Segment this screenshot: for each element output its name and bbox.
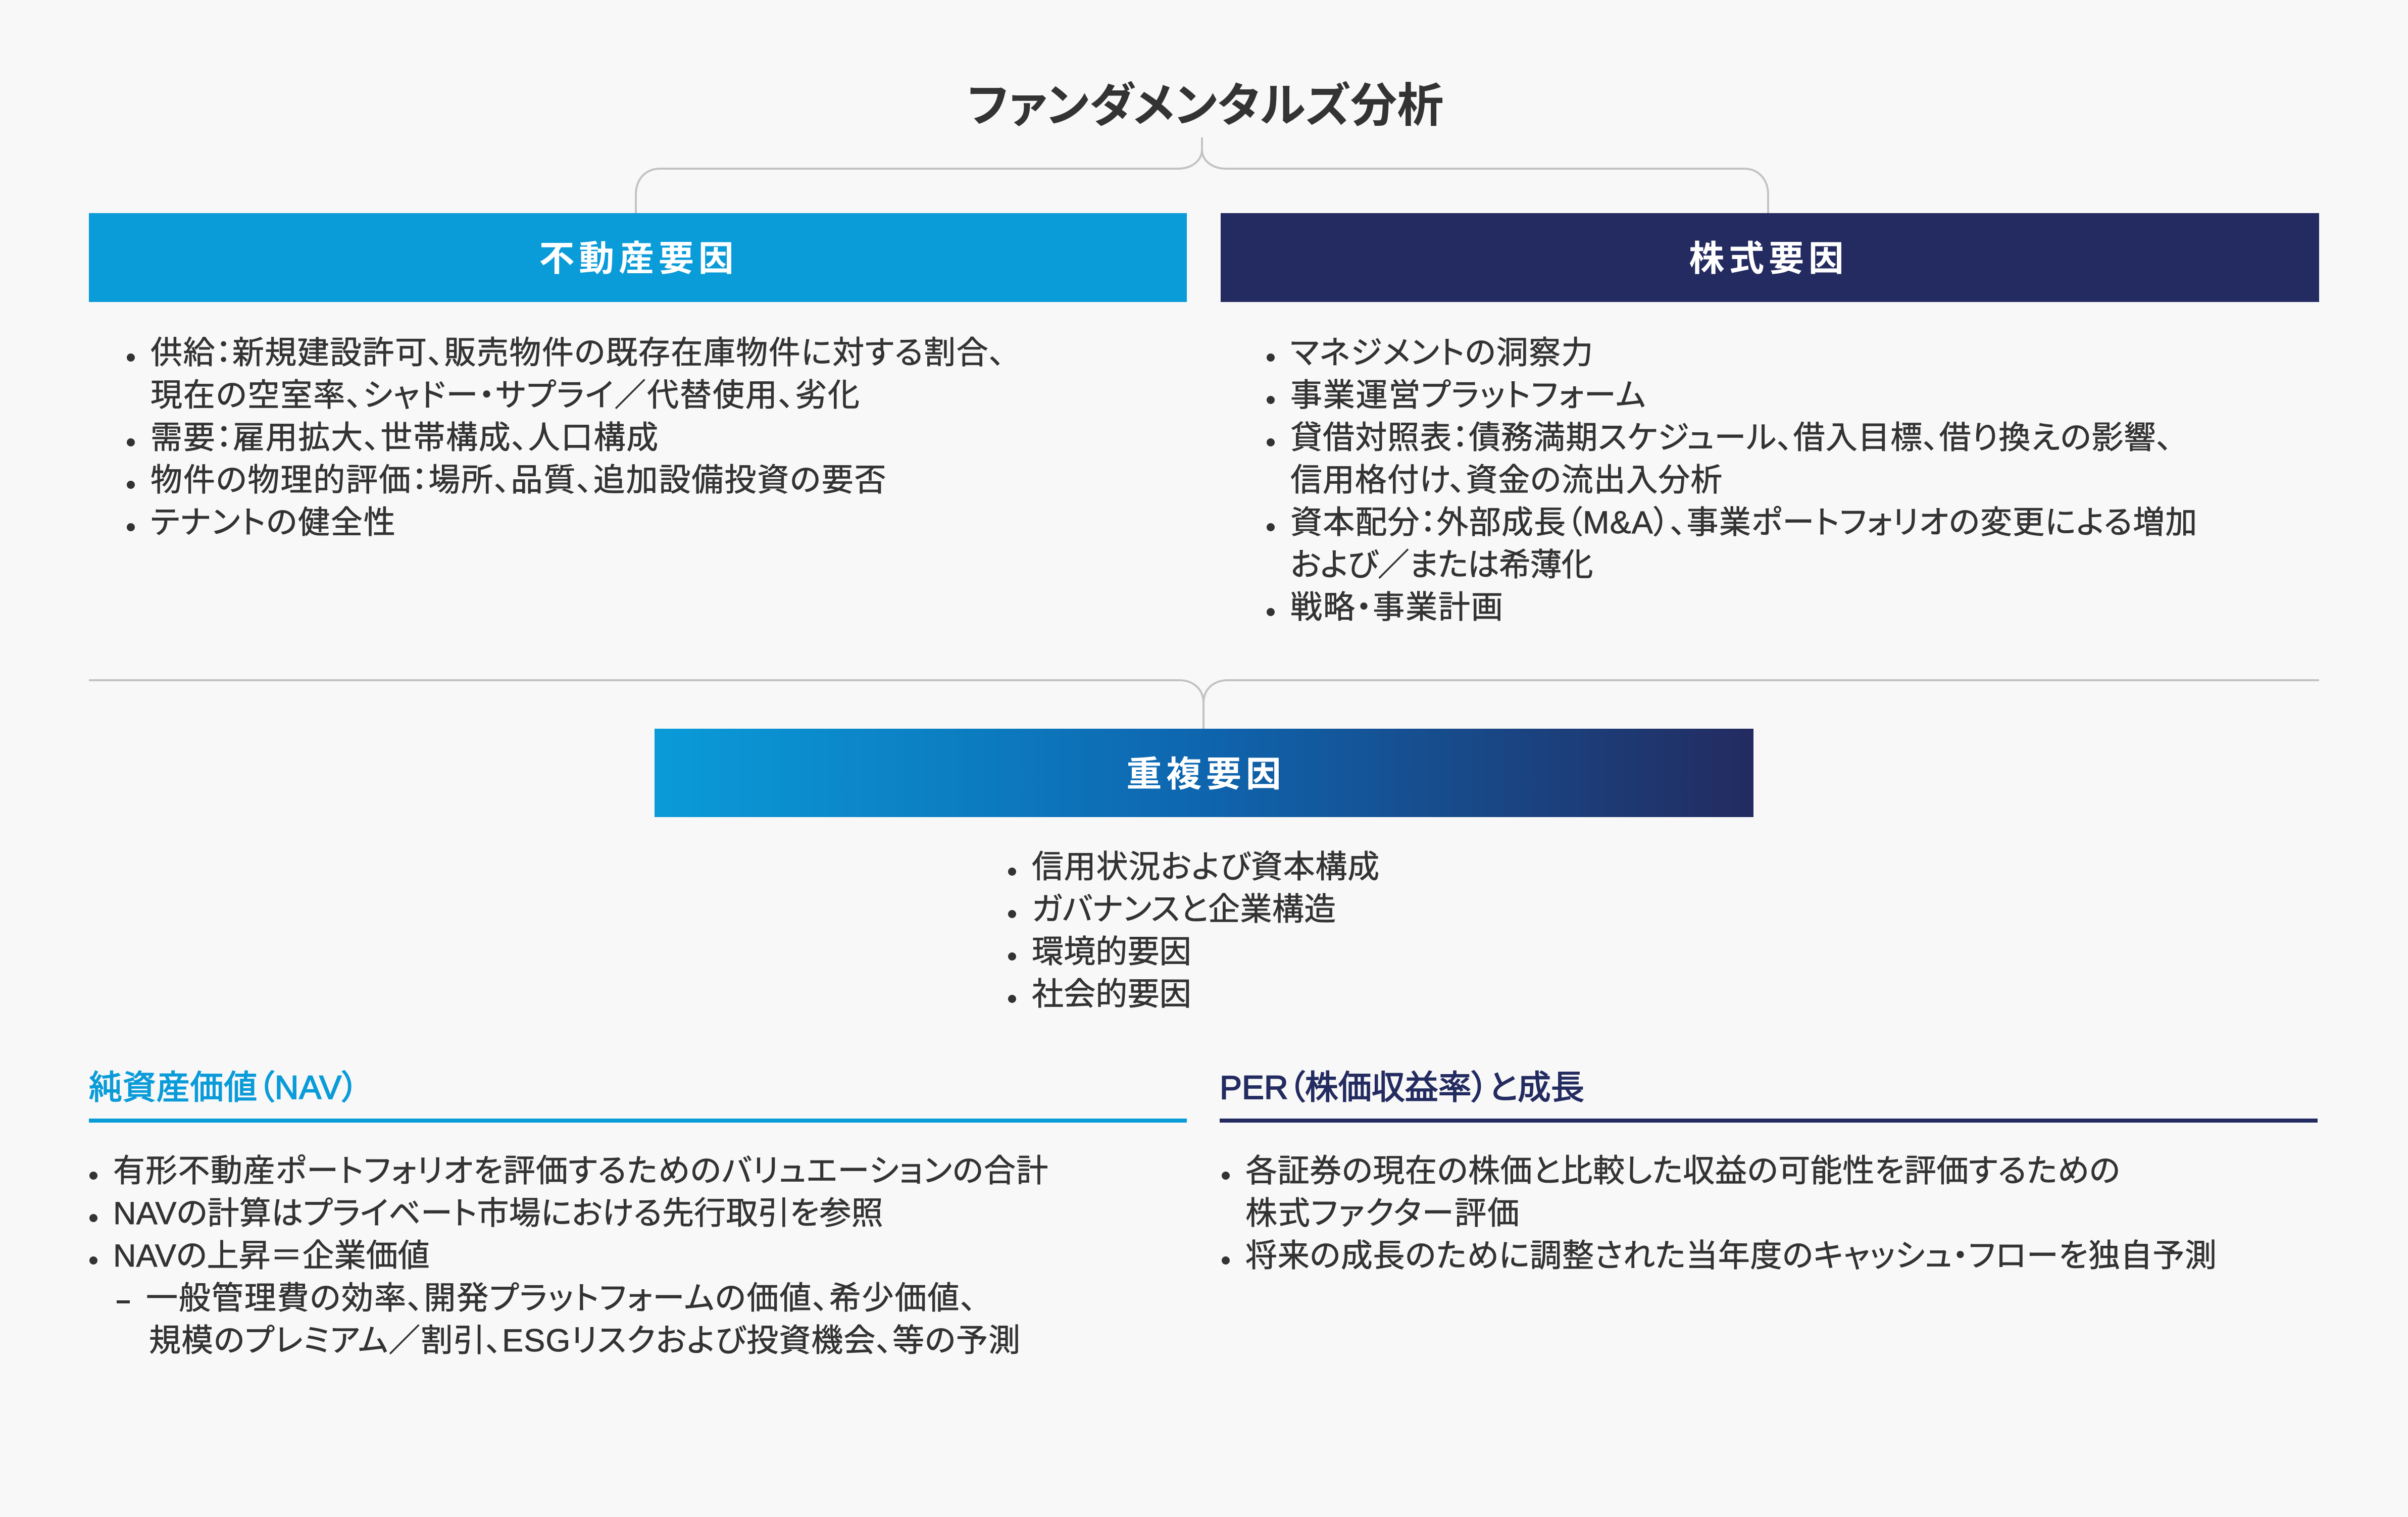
list: NAV: 規模のプレミアム／割引、ESGリスクおよび投資機会、等の予測 [149,1323,1021,1358]
list: PER [1222,1153,2217,1274]
list: overlapping factors: 環境的要因 [1032,934,1191,970]
list: overlapping factors: 信用状況および資本構成 [1032,849,1380,885]
panel header: equity factors: 株式要因 [1689,239,1848,278]
connector: title to two factor headers [635,137,1769,213]
list: PER: 株式ファクター評価 [1245,1196,1520,1231]
list: overlapping factors: 社会的要因 [1032,977,1191,1012]
panel header: real estate factors [89,213,1187,302]
panel header: overlapping factors: 重複要因 [1126,754,1286,794]
list: real estate factors [127,335,1006,540]
list: NAV: 有形不動産ポートフォリオを評価するためのバリュエーションの合計 [113,1153,1049,1189]
list: equity factors: マネジメントの洞察力 [1290,335,1594,371]
section heading: NAV: 純資産価値（NAV） [89,1069,359,1106]
list: overlapping factors [1008,849,1380,1012]
panel header: overlapping factors [655,729,1753,817]
list: equity factors: 資本配分：外部成長（M&A）、事業ポートフォリオの変更による増加 [1290,505,2198,540]
list: real estate factors: 物件の物理的評価：場所、品質、追加設備投資の要否 [150,463,887,498]
list: real estate factors: 需要：雇用拡大、世帯構成、人口構成 [150,420,659,456]
connector: divider to overlapping factors [89,679,2319,729]
panel header: real estate factors: 不動産要因 [539,239,738,278]
panel header: equity factors [1221,213,2319,302]
section heading: PER: PER（株価収益率）と成長 [1220,1069,1584,1106]
list: real estate factors: 現在の空室率、シャドー・サプライ／代替使用、劣化 [150,378,861,413]
list: PER: 将来の成長のために調整された当年度のキャッシュ・フローを独自予測 [1245,1238,2217,1274]
list: equity factors: および／または希薄化 [1290,547,1592,583]
list: equity factors: 戦略・事業計画 [1290,590,1504,625]
title: ファンダメンタルズ分析 [967,79,1444,132]
list: NAV: 一般管理費の効率、開発プラットフォームの価値、希少価値、 [146,1281,977,1316]
list: overlapping factors: ガバナンスと企業構造 [1032,892,1336,927]
list: NAV [89,1153,1049,1358]
list: real estate factors: テナントの健全性 [150,505,396,540]
list: NAV: NAVの上昇＝企業価値 [113,1238,430,1274]
list: NAV: NAVの計算はプライベート市場における先行取引を参照 [113,1196,883,1231]
list: real estate factors: 供給：新規建設許可、販売物件の既存在庫物件に対する割合、 [150,335,1006,371]
list: equity factors [1267,335,2198,625]
list: equity factors: 事業運営プラットフォーム [1290,378,1646,413]
list: PER: 各証券の現在の株価と比較した収益の可能性を評価するための [1245,1153,2120,1189]
list: equity factors: 信用格付け、資金の流出入分析 [1290,463,1723,498]
list: equity factors: 貸借対照表：債務満期スケジュール、借入目標、借り換えの影響、 [1290,420,2173,456]
